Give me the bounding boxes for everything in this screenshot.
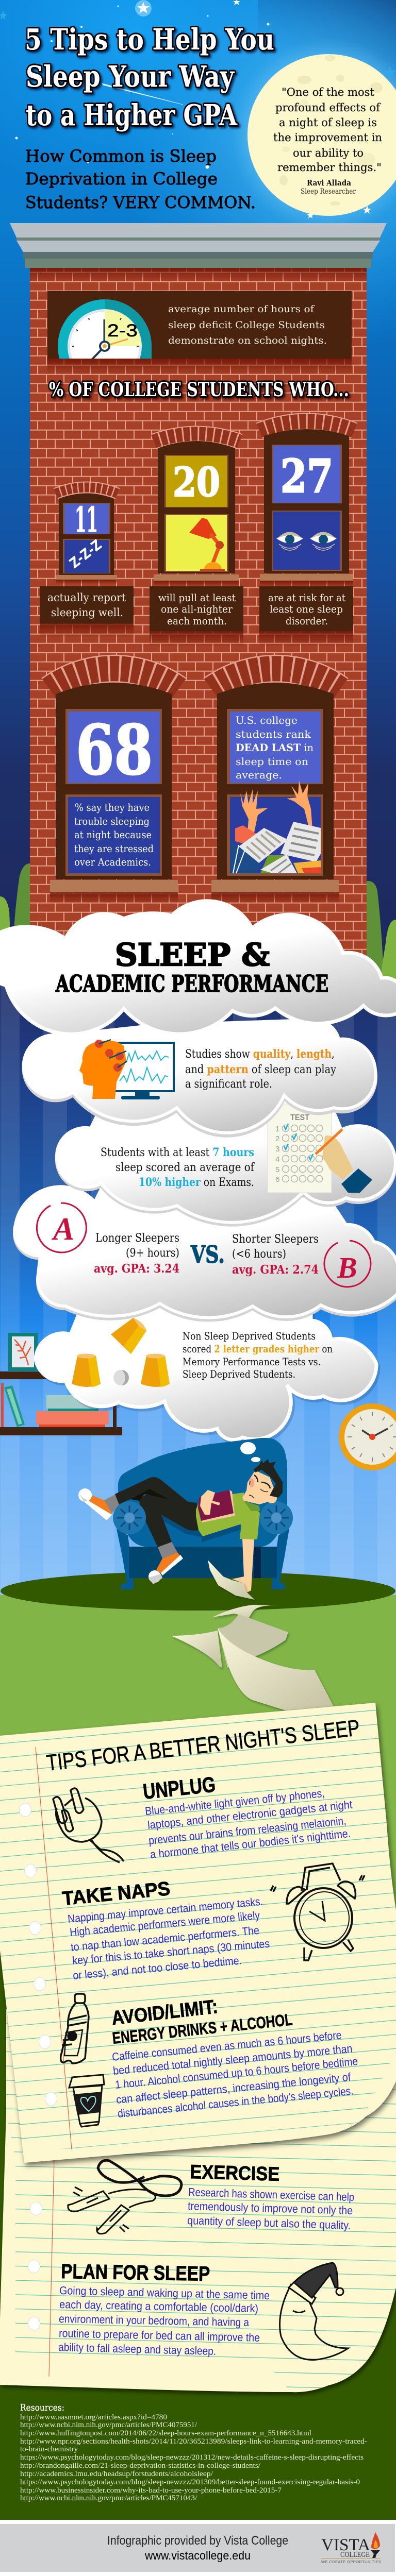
window text: at night because <box>74 828 152 841</box>
resource links: to-brain-chemistry <box>20 2445 78 2453</box>
title: Sleep Your Way <box>26 60 235 94</box>
icon: head and brain monitor <box>79 1040 174 1099</box>
title <box>25 23 274 132</box>
icon: test sheet: 5 <box>275 1165 279 1174</box>
body <box>187 2185 354 2232</box>
stars <box>0 0 396 218</box>
resource links: http://www.aasmnet.org/articles.aspx?id=4780 <box>20 2413 167 2421</box>
body: High academic performers were more likely <box>69 1909 260 1939</box>
body: quantity of sleep but also the quality. <box>187 2214 351 2232</box>
cloud text: scored 2 letter grades higher on <box>183 1343 333 1355</box>
window text: over Academics. <box>74 856 151 868</box>
cloud text <box>183 1330 333 1380</box>
resource links <box>20 2413 367 2502</box>
icon: shooting star <box>102 83 183 105</box>
icon: test sheet: 3 <box>275 1145 279 1154</box>
window text <box>236 714 314 781</box>
longer sleepers: (9+ hours) <box>126 1247 179 1260</box>
flying papers <box>171 1560 334 1710</box>
legs <box>77 1477 199 1584</box>
title: 5 Tips to Help You <box>25 23 274 57</box>
heading: EXERCISE <box>190 2161 280 2185</box>
notebook page: back sheet <box>0 2009 396 2392</box>
window text: average. <box>236 769 282 781</box>
body: to nap than low academic performers. The <box>70 1924 260 1954</box>
clock number: 2-3 <box>107 321 138 341</box>
quote text: a night of sleep is <box>279 116 377 129</box>
cloud: 7 hours <box>57 1103 395 1223</box>
caption: sleep disorder: are at risk for at <box>268 591 345 604</box>
body: Caffeine consumed even as much as 6 hours before <box>111 2028 342 2063</box>
icon: test sheet: 4 <box>275 1155 279 1164</box>
icon: cups and ball <box>72 1318 170 1387</box>
caption: all-nighter: each month. <box>167 615 227 627</box>
cloud text: and pattern of sleep can play <box>185 1063 336 1076</box>
window: 11: 11 <box>75 500 98 540</box>
moon with quote <box>248 54 396 216</box>
heading: UNPLUG <box>142 1772 217 1804</box>
cloud: GPA comparison <box>14 1185 396 1317</box>
panel text <box>168 303 327 346</box>
quote text: the improvement in <box>273 131 382 144</box>
logo: Vista College <box>321 2532 381 2564</box>
resource links: http://www.ncbi.nlm.nih.gov/pmc/articles/PMC4075951/ <box>20 2421 197 2429</box>
head <box>242 1459 283 1504</box>
icon: test sheet: 1 <box>275 1125 279 1133</box>
website: www.vistacollege.edu <box>144 2549 251 2562</box>
logo: Vista College: VISTA <box>321 2536 370 2554</box>
body: Blue-and-white light given off by phones, <box>144 1787 325 1818</box>
resource links: http://www.businessinsider.com/why-its-bad-to-use-your-phone-before-bed-2015-7 <box>20 2486 282 2495</box>
caption: actually report: sleeping well. <box>51 606 123 619</box>
body: laptops, and other electronic gadgets at night <box>147 1798 353 1832</box>
body: tremendously to improve not only the <box>188 2199 353 2217</box>
body: disturbances alcohol causes in the body's sleep cycles. <box>117 2084 354 2120</box>
icon: tired eyes <box>276 532 337 550</box>
shorter sleepers: Shorter Sleepers <box>232 1233 319 1246</box>
body <box>144 1787 353 1861</box>
quote text: profound effects of <box>275 101 381 114</box>
body <box>111 2028 358 2120</box>
subheading: ENERGY DRINKS + ALCOHOL <box>111 2010 293 2047</box>
body: bed reduced total nightly sleep amounts by more than <box>112 2042 353 2077</box>
quote attribution: Sleep Researcher <box>301 188 356 196</box>
notebook page: front sheet <box>0 1703 396 2163</box>
number: 27 <box>280 449 333 503</box>
icon: moon with nightcap <box>279 2263 348 2360</box>
window: 20 <box>154 434 240 586</box>
quote text <box>273 86 382 174</box>
window text: students rank <box>236 728 311 740</box>
building: brick wall <box>30 268 367 1036</box>
shorter sleepers: (<6 hours) <box>232 1248 286 1261</box>
heading text: SLEEP & <box>115 937 270 973</box>
heading: TAKE NAPS <box>61 1878 171 1910</box>
tip: avoid/limit <box>61 1994 358 2127</box>
icon: test sheet: 6 <box>275 1175 279 1184</box>
quote attribution: Ravi Allada <box>307 178 351 188</box>
caption: sleep disorder: least one sleep <box>270 603 343 615</box>
shirt <box>196 1493 260 1539</box>
shorter sleepers <box>232 1233 319 1277</box>
heading: AVOID/LIMIT: <box>110 1996 219 2029</box>
heading text <box>55 937 328 997</box>
caption: actually report: actually report <box>47 591 126 604</box>
hand <box>200 1490 220 1515</box>
resource links: http://www.huffingtonpost.com/2014/06/22/sleep-hours-exam-performance_n_5516643.html <box>20 2429 311 2437</box>
longer sleepers <box>94 1232 179 1276</box>
armrest: left <box>113 1501 146 1534</box>
icon: plug <box>53 1788 124 1862</box>
background: striped wall <box>0 981 396 1600</box>
body: 1 hour. Alcohol consumed up to 6 hours before bedtime <box>114 2055 358 2091</box>
panel: sleep deficit clock <box>47 291 352 373</box>
chair <box>117 1438 289 1589</box>
body: or less), and not too close to bedtime. <box>72 1954 242 1982</box>
icon: alarm clock <box>271 1863 365 1960</box>
window text <box>74 801 154 868</box>
body: Research has shown exercise can help <box>188 2185 354 2204</box>
window text: they are stressed <box>74 842 154 855</box>
icon: test sheet <box>268 1104 372 1193</box>
window: 27 <box>259 421 354 587</box>
body <box>67 1895 270 1982</box>
resource links: http://brandongaille.com/21-sleep-deprivation-statistics-in-college-students/ <box>20 2462 261 2470</box>
longer sleepers: Longer Sleepers <box>95 1232 179 1245</box>
subtitle: How Common is Sleep <box>25 146 217 166</box>
caption: all-nighter <box>150 586 243 647</box>
cloud text: Studies show quality, length, <box>185 1047 335 1061</box>
heading: PLAN FOR SLEEP <box>61 2260 210 2285</box>
caption: all-nighter: will pull at least <box>158 591 236 604</box>
window: dead last <box>211 669 340 904</box>
subtitle: Students? VERY COMMON. <box>25 193 256 212</box>
cloud text: Memory Performance Tests vs. <box>183 1355 321 1368</box>
window text: % say they have <box>75 801 150 814</box>
quote text: our ability to <box>293 147 364 159</box>
icon: jump rope <box>68 2160 182 2234</box>
window text: sleep time on <box>236 755 308 768</box>
window: 68 <box>50 669 178 904</box>
cloud text: sleep scored an average of <box>116 1161 255 1174</box>
footer <box>0 2520 396 2576</box>
trees <box>0 863 396 1030</box>
number: 20 <box>173 459 220 506</box>
cloud text <box>185 1047 336 1091</box>
body: ability to fall asleep and stay asleep. <box>58 2341 216 2358</box>
resource links: http://www.npr.org/sections/health-shots/2014/11/20/365213989/sleeps-link-to-learning-and-memory-traced- <box>20 2437 367 2446</box>
subtitle: Deprivation in College <box>25 169 218 189</box>
icon: clock <box>58 299 152 359</box>
caption: all-nighter: one all-nighter <box>161 603 233 615</box>
icon: desk lamp <box>189 518 225 571</box>
cloud text: a significant role. <box>185 1078 272 1091</box>
shelves with books and frame <box>0 1333 122 1435</box>
logo: Vista College: WE CREATE OPPORTUNITIES <box>321 2560 381 2564</box>
tip: plan for sleep <box>58 2260 348 2360</box>
icon: B grade: B <box>337 1251 357 1284</box>
icon: wall clock <box>339 1403 396 1470</box>
icon: A grade <box>37 1203 86 1252</box>
window text: trouble sleeping <box>74 815 150 827</box>
cloud text: 10% higher on Exams. <box>139 1176 254 1189</box>
body: environment in your bedroom, and having a <box>59 2312 250 2329</box>
icon: B grade <box>324 1241 371 1287</box>
icon: energy drink bottle <box>61 1994 89 2063</box>
building cornice <box>10 223 387 268</box>
icon: test sheet: 2 <box>275 1134 279 1143</box>
cloud text: Non Sleep Deprived Students <box>183 1330 316 1342</box>
resource links: https://www.psychologytoday.com/blog/sleep-newzzz/201309/better-sleep-found-exercising-regular-basis-0 <box>20 2478 360 2486</box>
cloud text: Sleep Deprived Students. <box>183 1368 295 1380</box>
icon: test sheet: TEST <box>290 1113 309 1122</box>
logo: Vista College: COLLEGE <box>340 2551 370 2559</box>
resources <box>20 2402 367 2502</box>
body: a hormone that tells our bodies it's nighttime. <box>150 1827 351 1861</box>
resource links: http://www.ncbi.nlm.nih.gov/pmc/articles/PMC4571043/ <box>20 2494 197 2502</box>
panel text: average number of hours of <box>168 303 315 315</box>
thought bubbles <box>240 1442 260 1462</box>
cloud text <box>101 1146 255 1189</box>
caption: actually report <box>40 586 134 638</box>
tip: unplug <box>53 1772 353 1862</box>
cloud: studies show <box>24 1020 376 1133</box>
collar <box>244 1501 260 1511</box>
armrest: right <box>260 1501 293 1534</box>
quote text: "One of the most <box>282 86 375 98</box>
body: Napping may improve certain memory tasks. <box>67 1895 263 1925</box>
resource links: http://academics.lmu.edu/headsup/forstudents/alcoholsleep/ <box>20 2470 213 2478</box>
icon: z-z-z: Z-Z-Z <box>67 537 105 572</box>
window: 11 <box>56 487 118 584</box>
book <box>198 1490 235 1522</box>
window text: DEAD LAST in <box>236 741 314 754</box>
cloud: memory <box>36 1309 376 1440</box>
number: 68 <box>76 710 153 790</box>
icon: coffee cup <box>69 2075 104 2127</box>
arm <box>232 1539 254 1593</box>
background: night sky <box>0 0 396 1061</box>
shorter sleepers: avg. GPA: 2.74 <box>232 1263 319 1277</box>
body: Going to sleep and waking up at the same time <box>59 2284 270 2302</box>
longer sleepers: avg. GPA: 3.24 <box>94 1262 179 1276</box>
sleeping student in armchair <box>77 1438 293 1593</box>
tip: exercise <box>68 2160 354 2234</box>
body: key for this is to take short naps (30 minutes <box>72 1937 270 1967</box>
resources: Resources: <box>20 2402 64 2413</box>
body: can affect sleep patterns, increasing the longevity of <box>116 2070 352 2106</box>
caption: sleep disorder <box>259 586 353 647</box>
panel text: sleep deficit College Students <box>168 319 325 331</box>
title: to a Higher GPA <box>26 98 238 132</box>
icon: hands and books <box>230 781 321 873</box>
cloud text: Students with at least 7 hours <box>101 1146 254 1159</box>
ground <box>0 1571 396 2520</box>
tip: take naps <box>61 1863 365 1982</box>
resource links: https://www.psychologytoday.com/blog/sleep-newzzz/201312/new-details-caffeine-s-sleep-disrupting-effects <box>20 2453 364 2462</box>
VS: VS. <box>190 1241 225 1268</box>
body: prevents our brains from releasing melatonin, <box>148 1814 347 1847</box>
caption: sleep disorder: disorder. <box>286 615 328 627</box>
body <box>58 2284 270 2358</box>
icon: A grade: A <box>51 1212 74 1247</box>
quote attribution <box>301 178 356 196</box>
body: each day, creating a comfortable (cool/dark) <box>59 2298 258 2315</box>
window text: U.S. college <box>236 714 298 726</box>
credit line: Infographic provided by Vista College <box>107 2534 288 2548</box>
body: routine to prepare for bed can all improve the <box>59 2327 260 2344</box>
panel text: demonstrate on school nights. <box>168 335 327 346</box>
quote text: remember things." <box>277 161 382 174</box>
cloud: sleep and academic performance heading <box>0 901 396 1034</box>
subtitle <box>25 146 256 212</box>
